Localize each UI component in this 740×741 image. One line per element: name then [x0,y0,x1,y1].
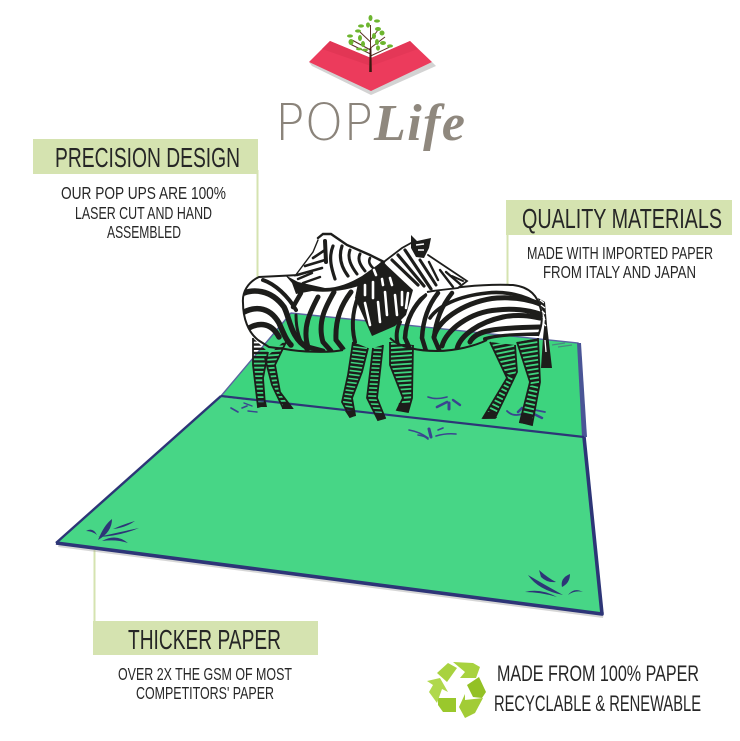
leaf cutout: back top right [552,343,572,347]
leaf cutout: centre [409,428,456,439]
zebra hooves [397,403,533,425]
heading band: precision design: PRECISION DESIGN [55,142,240,173]
text block: quality materials [527,243,713,282]
text block: precision design: LASER CUT AND HAND [75,203,212,223]
zebra hooves [258,402,386,419]
text block: thicker paper: COMPETITORS' PAPER [136,683,274,703]
icon: red open book with tree [309,15,436,95]
zebra outline [390,285,542,351]
heading band: thicker paper [93,621,318,655]
card back panel [221,313,584,437]
panel: thicker paper [93,550,318,703]
leaf cutout: front left [86,519,139,543]
leaf cutout: back left [231,403,257,412]
zebras [243,234,552,425]
icon: recycling arrows [427,662,486,718]
zebra head [385,235,467,291]
text block: precision design: ASSEMBLED [107,222,181,242]
heading band: precision design [33,139,258,174]
zebra body stripes [397,292,540,352]
zebra head [285,234,387,294]
zebra tail [538,298,552,368]
text block: thicker paper [118,664,292,703]
zebra body stripes [244,280,362,351]
zebra: left [243,234,387,420]
leaf cutout: back right [507,408,545,418]
text block: precision design [61,183,226,242]
zebra outline [243,275,343,352]
logo [275,15,465,153]
text block: recycling [494,661,701,716]
pop-up card [56,313,604,618]
leaf cutout: back centre [428,397,460,409]
panel: quality materials [506,200,732,284]
text block: thicker paper: OVER 2X THE GSM OF MOST [118,664,292,684]
leaf cutout: front right [525,570,583,597]
panel: precision design [33,139,258,278]
heading band: thicker paper: THICKER PAPER [128,624,281,655]
logo wordmark: POP: POP [275,94,373,153]
text block: precision design: OUR POP UPS ARE 100% [61,183,226,203]
card navy edges [56,396,221,543]
zebra: right [385,235,552,425]
zebra legs [253,335,385,420]
text block: quality materials: FROM ITALY AND JAPAN [543,262,696,282]
zebra legs [390,338,540,425]
logo wordmark: Life: Life [373,95,465,152]
recycling section [427,661,701,718]
zebras overlapping neck mesh [355,261,413,336]
card front panel [56,397,602,614]
